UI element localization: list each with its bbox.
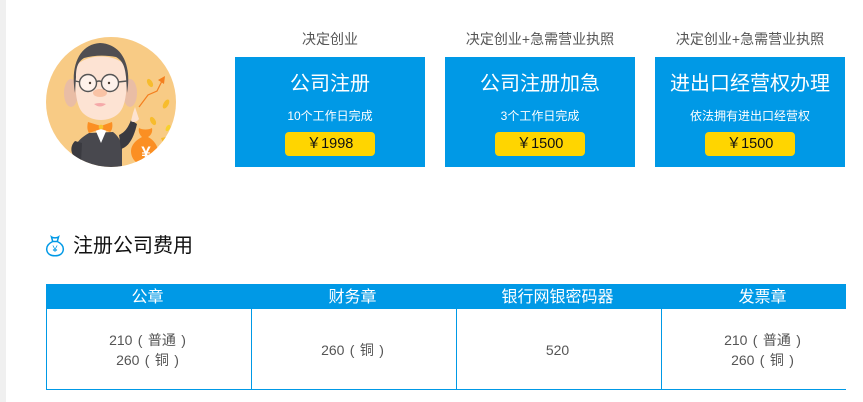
panel: expedited registration: 公司注册加急 [480, 73, 600, 95]
price button: ￥1500 [727, 136, 773, 152]
table: company registration fees: 210 ( 普通 ) 260 ( 铜 ) [109, 332, 186, 368]
table: company registration fees: 520 [546, 342, 569, 358]
panel: expedited registration [445, 57, 635, 167]
table: company registration fees [46, 284, 846, 390]
icon: avatar of a businessman in a circle [46, 37, 176, 167]
price button: ￥1500 [517, 136, 563, 152]
table: company registration fees: 公章 [131, 289, 164, 306]
icon: money bag [46, 235, 64, 256]
icon: avatar of a businessman in a circle: ¥ [141, 143, 151, 162]
price button: ￥1998 [307, 136, 353, 152]
table: company registration fees: 银行网银密码器 [501, 289, 614, 306]
price button [285, 132, 375, 156]
panel: expedited registration: 3个工作日完成 [501, 109, 579, 123]
table: company registration fees: 260 ( 铜 ) [321, 342, 384, 358]
price button [495, 132, 585, 156]
table header bar [46, 284, 846, 309]
label: card 2 audience: 决定创业+急需营业执照 [466, 31, 614, 47]
panel: import and export rights: 进出口经营权办理 [670, 73, 830, 95]
table: company registration fees: 210 ( 普通 ) 260 ( 铜 ) [724, 332, 801, 368]
panel: company registration: 10个工作日完成 [287, 109, 373, 123]
panel: company registration [235, 57, 425, 167]
panel: company registration: 公司注册 [290, 73, 370, 95]
icon: money bag: ¥ [51, 244, 58, 254]
label: card 3 audience: 决定创业+急需营业执照 [676, 31, 824, 47]
panel: import and export rights: 依法拥有进出口经营权 [690, 109, 810, 123]
table: company registration fees: 财务章 [328, 289, 376, 306]
price button [705, 132, 795, 156]
heading: registration fees: 注册公司费用 [73, 235, 193, 257]
label: card 1 audience: 决定创业 [302, 31, 358, 47]
table: company registration fees: 发票章 [738, 289, 786, 306]
panel: import and export rights [655, 57, 845, 167]
